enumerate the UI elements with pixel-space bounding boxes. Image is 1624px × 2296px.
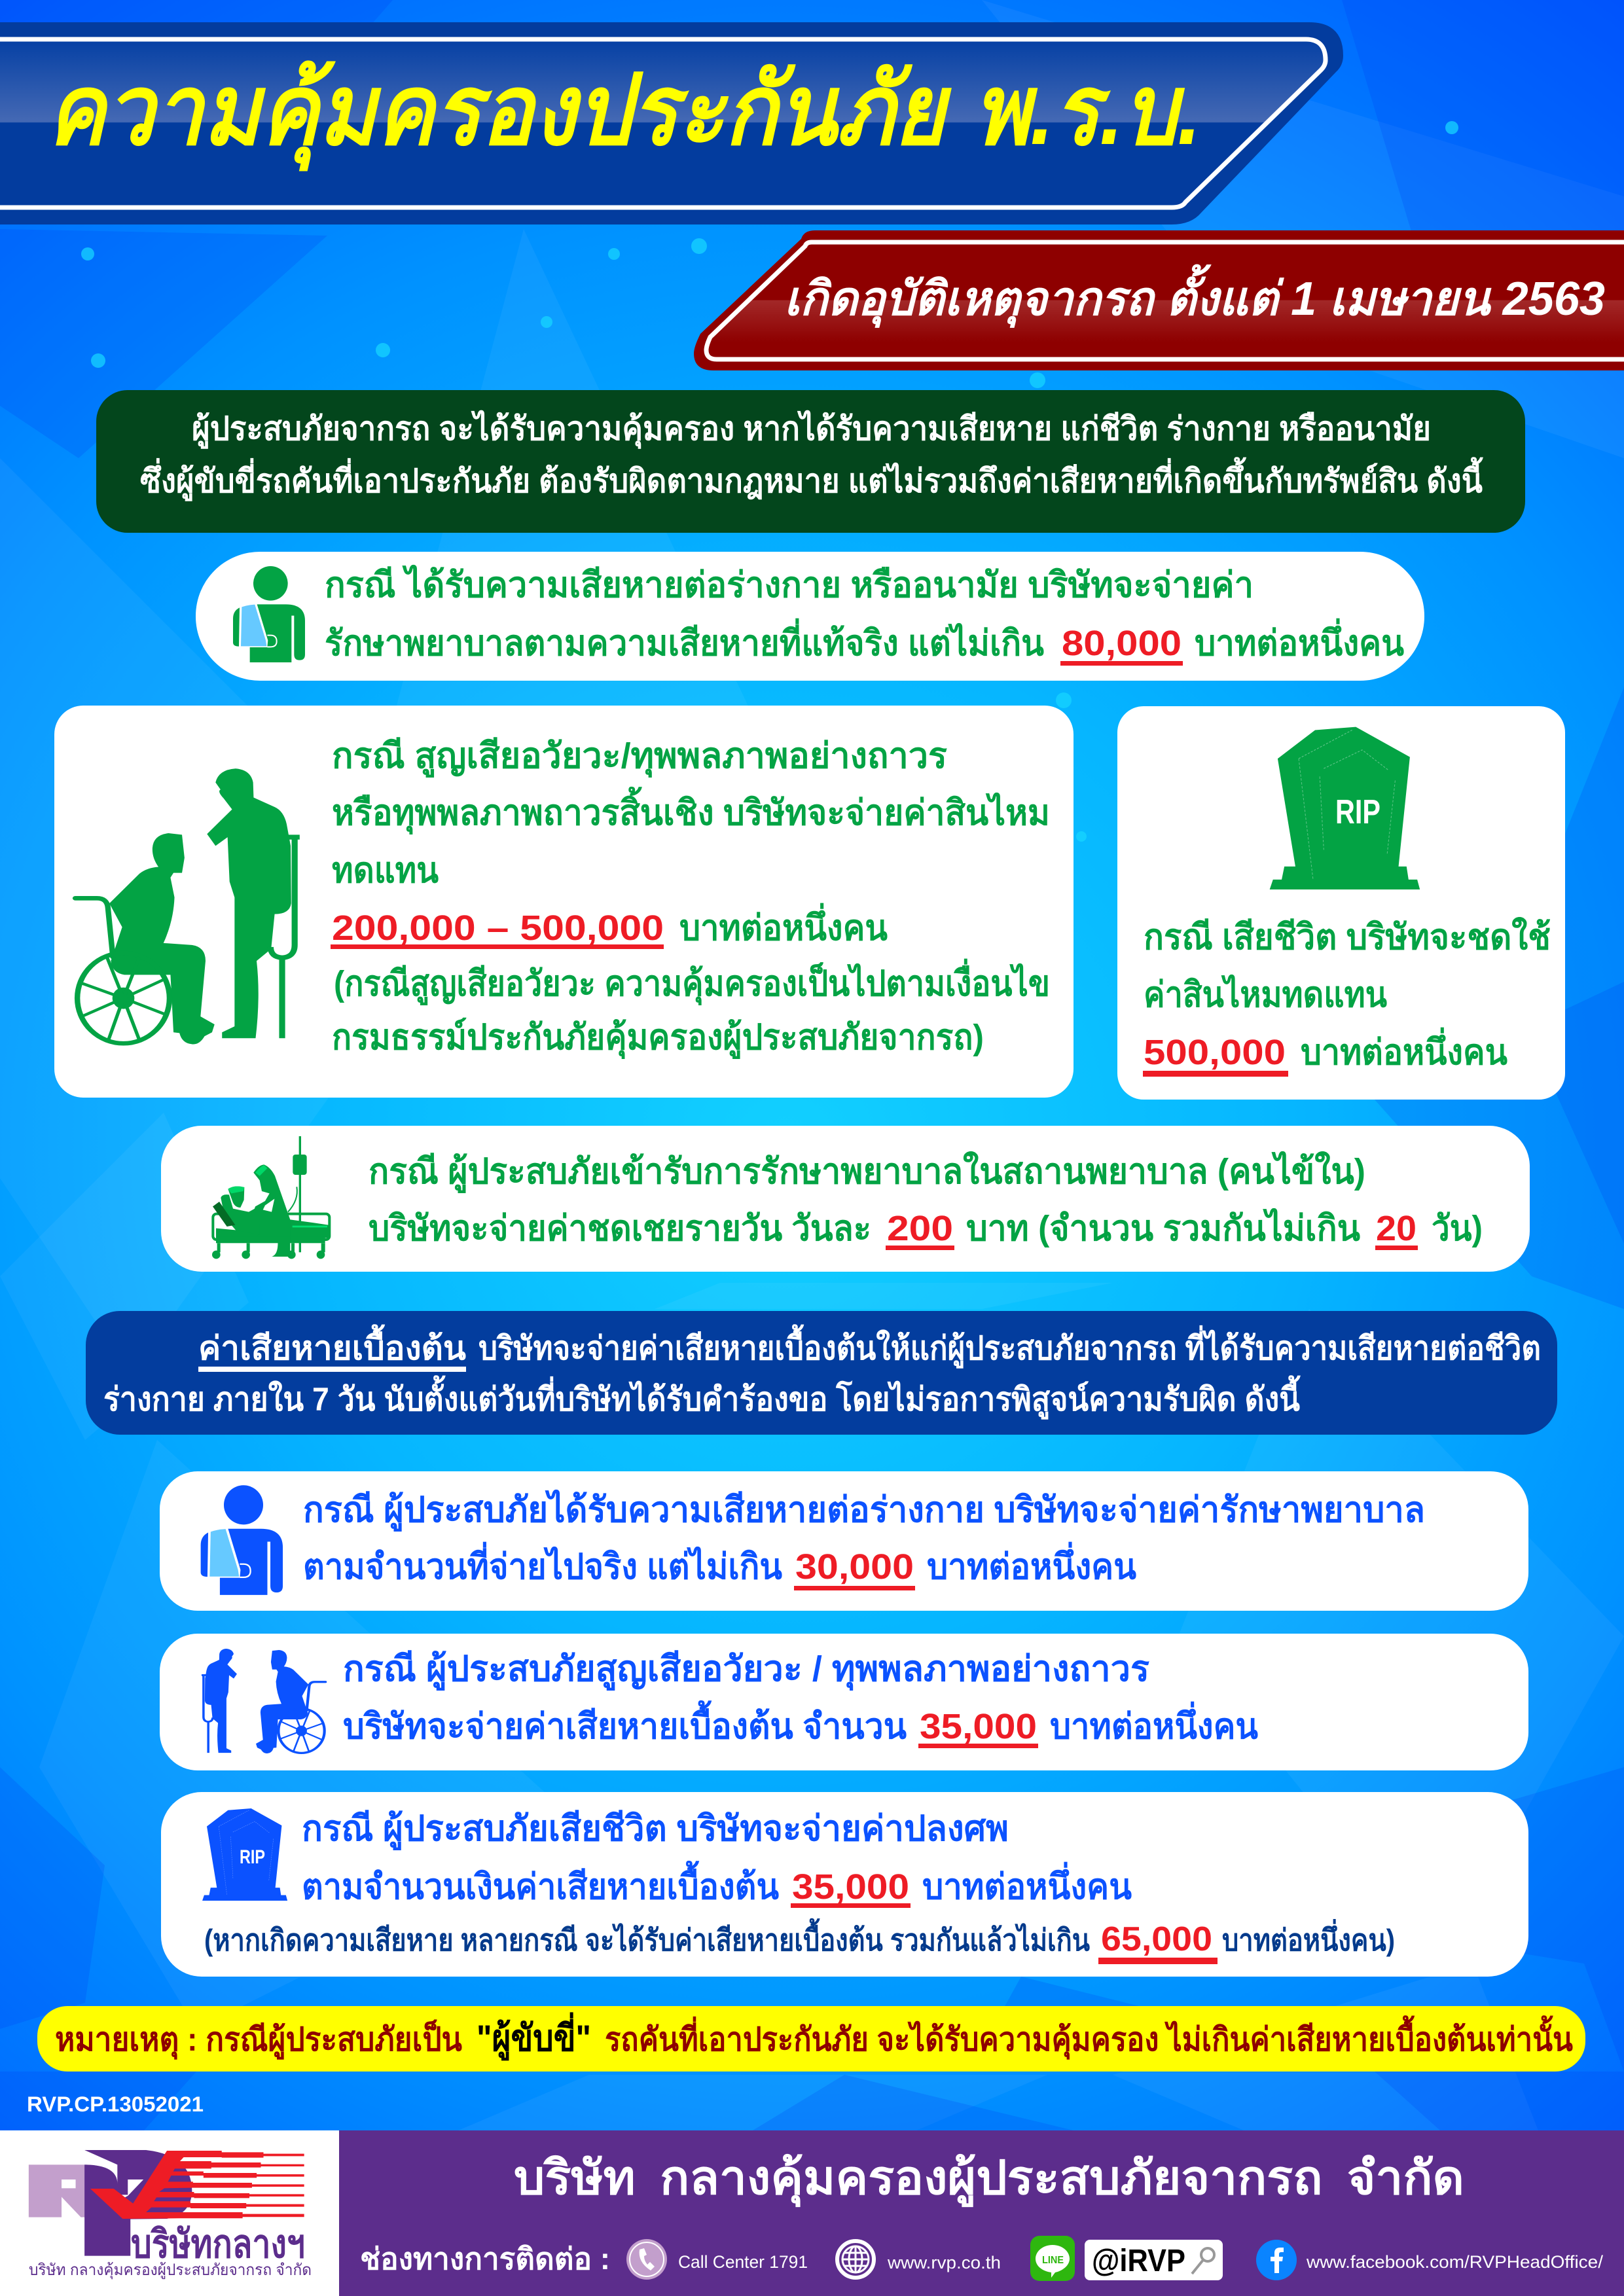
panel text: บาทต่อหนึ่งคน	[679, 903, 888, 948]
panel text: กรมธรรม์ประกันภัยคุ้มครองผู้ประสบภัยจากรถ)	[332, 1017, 984, 1060]
panel text: กรณี ได้รับความเสียหายต่อร่างกาย หรืออนามัย บริษัทจะจ่ายค่า	[325, 564, 1254, 605]
intro text	[140, 410, 1483, 501]
note text: "ผู้ขับขี่"	[477, 2012, 591, 2061]
panel: preliminary injury	[160, 1471, 1528, 1611]
panel: disability	[54, 706, 1074, 1098]
icon: line: LINE	[1042, 2255, 1064, 2266]
panel text: 20	[1376, 1209, 1416, 1248]
panel text: กรณี ผู้ประสบภัยเสียชีวิต บริษัทจะจ่ายค่าปลงศพ	[302, 1809, 1009, 1850]
intro text: ซึ่งผู้ขับขี่รถคันที่เอาประกันภัย ต้องรับผิดตามกฎหมาย แต่ไม่รวมถึงค่าเสียหายที่เกิดขึ้นกับทรัพย์สิน ดังนี้	[140, 457, 1483, 501]
website: www.rvp.co.th	[887, 2253, 1001, 2272]
panel text: 500,000	[1144, 1033, 1286, 1072]
panel text: กรณี เสียชีวิต บริษัทจะชดใช้	[1144, 916, 1551, 957]
line id	[1085, 2240, 1223, 2280]
panel text: กรณี ผู้ประสบภัยสูญเสียอวัยวะ / ทุพพลภาพอย่างถาวร	[343, 1649, 1149, 1691]
icon: wheelchair and amputee	[75, 768, 300, 1045]
panel text	[369, 1151, 1483, 1250]
icon: hospital bed	[212, 1136, 329, 1259]
panel text: หรือทุพพลภาพถาวรสิ้นเชิง บริษัทจะจ่ายค่าสินไหม	[332, 787, 1050, 835]
line id: @iRVP	[1092, 2244, 1185, 2278]
panel text: (กรณีสูญเสียอวัยวะ ความคุ้มครองเป็นไปตามเงื่อนไข	[334, 958, 1050, 1006]
panel text	[343, 1649, 1258, 1748]
panel text: กรณี ผู้ประสบภัยเข้ารับการรักษาพยาบาลในสถานพยาบาล (คนไข้ใน)	[369, 1151, 1365, 1193]
panel text: ตามจำนวนเงินค่าเสียหายเบื้องต้น	[302, 1861, 779, 1907]
note text: หมายเหตุ : กรณีผู้ประสบภัยเป็น	[55, 2019, 462, 2060]
intro text: ผู้ประสบภัยจากรถ จะได้รับความคุ้มครอง หากได้รับความเสียหาย แก่ชีวิต ร่างกาย หรืออนามัย	[192, 410, 1431, 449]
panel text: กรณี สูญเสียอวัยวะ/ทุพพลภาพอย่างถาวร	[332, 736, 947, 778]
panel: preliminary disability	[160, 1634, 1528, 1770]
contact label: ช่องทางการติดต่อ :	[360, 2242, 610, 2276]
logo: บริษัทกลางฯ	[131, 2222, 305, 2266]
panel text: กรณี ผู้ประสบภัยได้รับความเสียหายต่อร่างกาย บริษัทจะจ่ายค่ารักษาพยาบาล	[303, 1489, 1425, 1532]
icon: gravestone	[202, 1808, 287, 1901]
icon: amputee and wheelchair	[202, 1649, 325, 1753]
date text: เกิดอุบัติเหตุจากรถ ตั้งแต่ 1 เมษายน 2563	[784, 264, 1605, 328]
panel text	[1143, 916, 1551, 1077]
panel: medical expense	[196, 552, 1424, 681]
panel text: บาทต่อหนึ่งคน	[1195, 618, 1404, 663]
panel text: ทดแทน	[332, 851, 439, 890]
logo	[29, 2150, 312, 2280]
panel text: วัน)	[1432, 1209, 1483, 1248]
footnote: (หากเกิดความเสียหาย หลายกรณี จะได้รับค่าเสียหายเบื้องต้น รวมกันแล้วไม่เกิน	[204, 1918, 1090, 1957]
panel: intro	[96, 390, 1525, 533]
icon: arm sling	[201, 1485, 283, 1595]
panel: preliminary death	[161, 1792, 1528, 1977]
panel text: 80,000	[1062, 624, 1182, 663]
panel text: บาทต่อหนึ่งคน	[1301, 1027, 1507, 1072]
panel text: บาท (จำนวน รวมกันไม่เกิน	[966, 1208, 1360, 1248]
footnote: 65,000	[1101, 1920, 1212, 1958]
facebook url: www.facebook.com/RVPHeadOffice/	[1306, 2252, 1604, 2272]
panel text: บาทต่อหนึ่งคน	[927, 1541, 1136, 1587]
note bar	[37, 2006, 1585, 2072]
icon: gravestone: RIP	[240, 1846, 265, 1868]
panel text	[325, 564, 1404, 666]
note text	[55, 2012, 1573, 2061]
panel text: บาทต่อหนึ่งคน	[1050, 1701, 1258, 1746]
panel text: 35,000	[920, 1707, 1037, 1746]
panel text: 30,000	[795, 1547, 914, 1587]
title text: ความคุ้มครองประกันภัย	[47, 55, 952, 171]
company name: บริษัท กลางคุ้มครองผู้ประสบภัยจากรถ จำกัด	[514, 2152, 1464, 2208]
title banner	[0, 22, 1343, 224]
footer	[0, 2130, 1624, 2296]
preliminary text: ร่างกาย ภายใน 7 วัน นับตั้งแต่วันที่บริษัทได้รับคำร้องขอ โดยไม่รอการพิสูจน์ความรับผิด ดังนี้	[103, 1375, 1301, 1420]
preliminary text: ค่าเสียหายเบื้องต้น	[198, 1324, 466, 1367]
title text: พ.ร.บ.	[974, 55, 1201, 165]
panel text: 200,000 – 500,000	[332, 908, 664, 948]
panel text: บาทต่อหนึ่งคน	[922, 1861, 1132, 1907]
footnote	[204, 1918, 1395, 1964]
icon: gravestone	[1270, 727, 1420, 889]
panel text: 200	[887, 1209, 953, 1248]
logo: บริษัท กลางคุ้มครองผู้ประสบภัยจากรถ จำกัด	[29, 2261, 312, 2280]
call center: Call Center 1791	[678, 2252, 808, 2272]
panel: death	[1117, 706, 1565, 1100]
panel text	[331, 736, 1050, 1060]
panel text: ค่าสินไหมทดแทน	[1144, 974, 1387, 1014]
footnote: บาทต่อหนึ่งคน)	[1222, 1919, 1395, 1957]
document code: RVP.CP.13052021	[27, 2092, 204, 2116]
icon: arm sling	[233, 566, 305, 662]
icon: gravestone: RIP	[1335, 793, 1380, 831]
panel text	[303, 1489, 1425, 1590]
preliminary text: บริษัทจะจ่ายค่าเสียหายเบื้องต้นให้แก่ผู้ประสบภัยจากรถ ที่ได้รับความเสียหายต่อชีวิต	[478, 1324, 1541, 1369]
icon: globe	[837, 2241, 874, 2278]
icon: facebook	[1256, 2240, 1297, 2280]
panel: hospital stay	[161, 1126, 1530, 1272]
icon: phone	[626, 2239, 667, 2280]
panel text: 35,000	[792, 1867, 909, 1907]
panel text: ตามจำนวนที่จ่ายไปจริง แต่ไม่เกิน	[303, 1541, 782, 1587]
panel: preliminary damages	[86, 1311, 1557, 1435]
panel text	[302, 1809, 1132, 1908]
panel text: บริษัทจะจ่ายค่าชดเชยรายวัน วันละ	[369, 1209, 871, 1248]
date banner	[694, 230, 1624, 370]
panel text: รักษาพยาบาลตามความเสียหายที่แท้จริง แต่ไม่เกิน	[325, 618, 1044, 663]
icon: line	[1030, 2236, 1075, 2281]
panel text: บริษัทจะจ่ายค่าเสียหายเบื้องต้น จำนวน	[343, 1700, 907, 1746]
preliminary text	[103, 1324, 1541, 1420]
